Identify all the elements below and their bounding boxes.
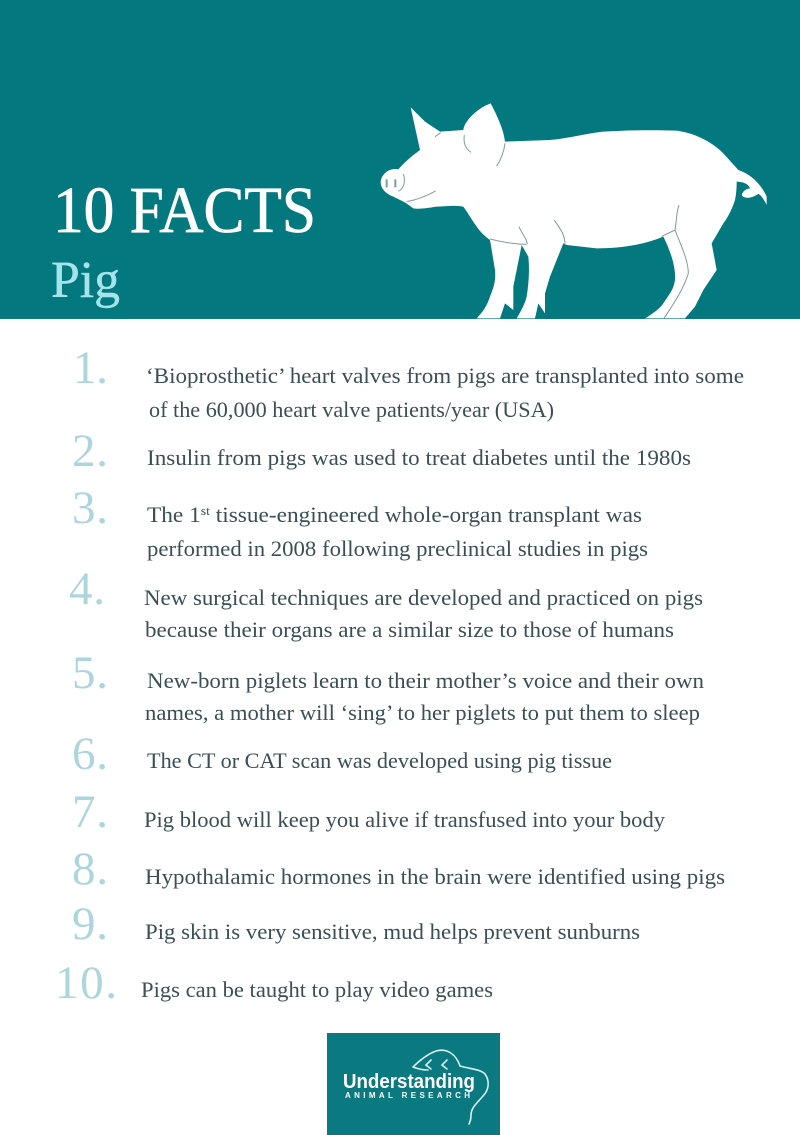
fact 5: 5. — [72, 647, 108, 699]
fact 8 — [72, 843, 725, 895]
fact 3: st — [201, 503, 210, 518]
fact 3: The 1 — [147, 502, 198, 527]
wordmark: Understanding — [343, 1071, 475, 1093]
fact 2 — [72, 425, 691, 477]
fact 8: Hypothalamic hormones in the brain were identified using pigs — [145, 864, 725, 889]
fact 1: 1. — [73, 342, 108, 394]
fact 2: 2. — [72, 425, 108, 477]
icon: pig silhouette — [381, 103, 767, 318]
subtitle: Pig — [51, 252, 120, 309]
tagline: ANIMAL RESEARCH — [345, 1091, 470, 1100]
fact 7: 7. — [72, 786, 108, 838]
fact 4: because their organs are a similar size to those of humans — [145, 617, 674, 642]
icon: rat outline — [413, 1050, 488, 1124]
fact 1: of the 60,000 heart valve patients/year (USA) — [149, 397, 554, 422]
fact 4: New surgical techniques are developed and practiced on pigs — [144, 585, 703, 610]
fact 4 — [69, 563, 703, 642]
fact 4: 4. — [69, 563, 105, 615]
fact 9 — [72, 898, 640, 950]
fact 5 — [72, 647, 704, 725]
logo: Understanding Animal Research — [327, 1033, 500, 1135]
fact 6 — [72, 728, 612, 780]
fact 3 — [72, 482, 648, 561]
fact 1 — [73, 342, 744, 422]
fact 5: names, a mother will ‘sing’ to her piglets to put them to sleep — [145, 700, 700, 725]
fact 2: Insulin from pigs was used to treat diabetes until the 1980s — [147, 445, 691, 470]
fact 7 — [72, 786, 665, 838]
fact 6: 6. — [72, 728, 108, 780]
fact 1: ‘Bioprosthetic’ heart valves from pigs are transplanted into some — [146, 363, 744, 388]
fact 10: 10. — [55, 957, 117, 1009]
fact 6: The CT or CAT scan was developed using pig tissue — [147, 748, 612, 773]
fact 9: Pig skin is very sensitive, mud helps prevent sunburns — [145, 919, 640, 944]
fact 5: New-born piglets learn to their mother’s voice and their own — [147, 668, 704, 693]
header banner — [0, 0, 800, 319]
fact 3: tissue-engineered whole-organ transplant was — [210, 502, 642, 527]
fact 8: 8. — [72, 843, 108, 895]
fact 9: 9. — [72, 898, 108, 950]
fact 10: Pigs can be taught to play video games — [141, 977, 493, 1002]
fact 3: 3. — [72, 482, 108, 534]
fact 7: Pig blood will keep you alive if transfused into your body — [144, 807, 665, 832]
fact 10 — [55, 957, 493, 1009]
title: 10 FACTS — [53, 174, 316, 247]
fact 3: performed in 2008 following preclinical studies in pigs — [147, 536, 648, 561]
